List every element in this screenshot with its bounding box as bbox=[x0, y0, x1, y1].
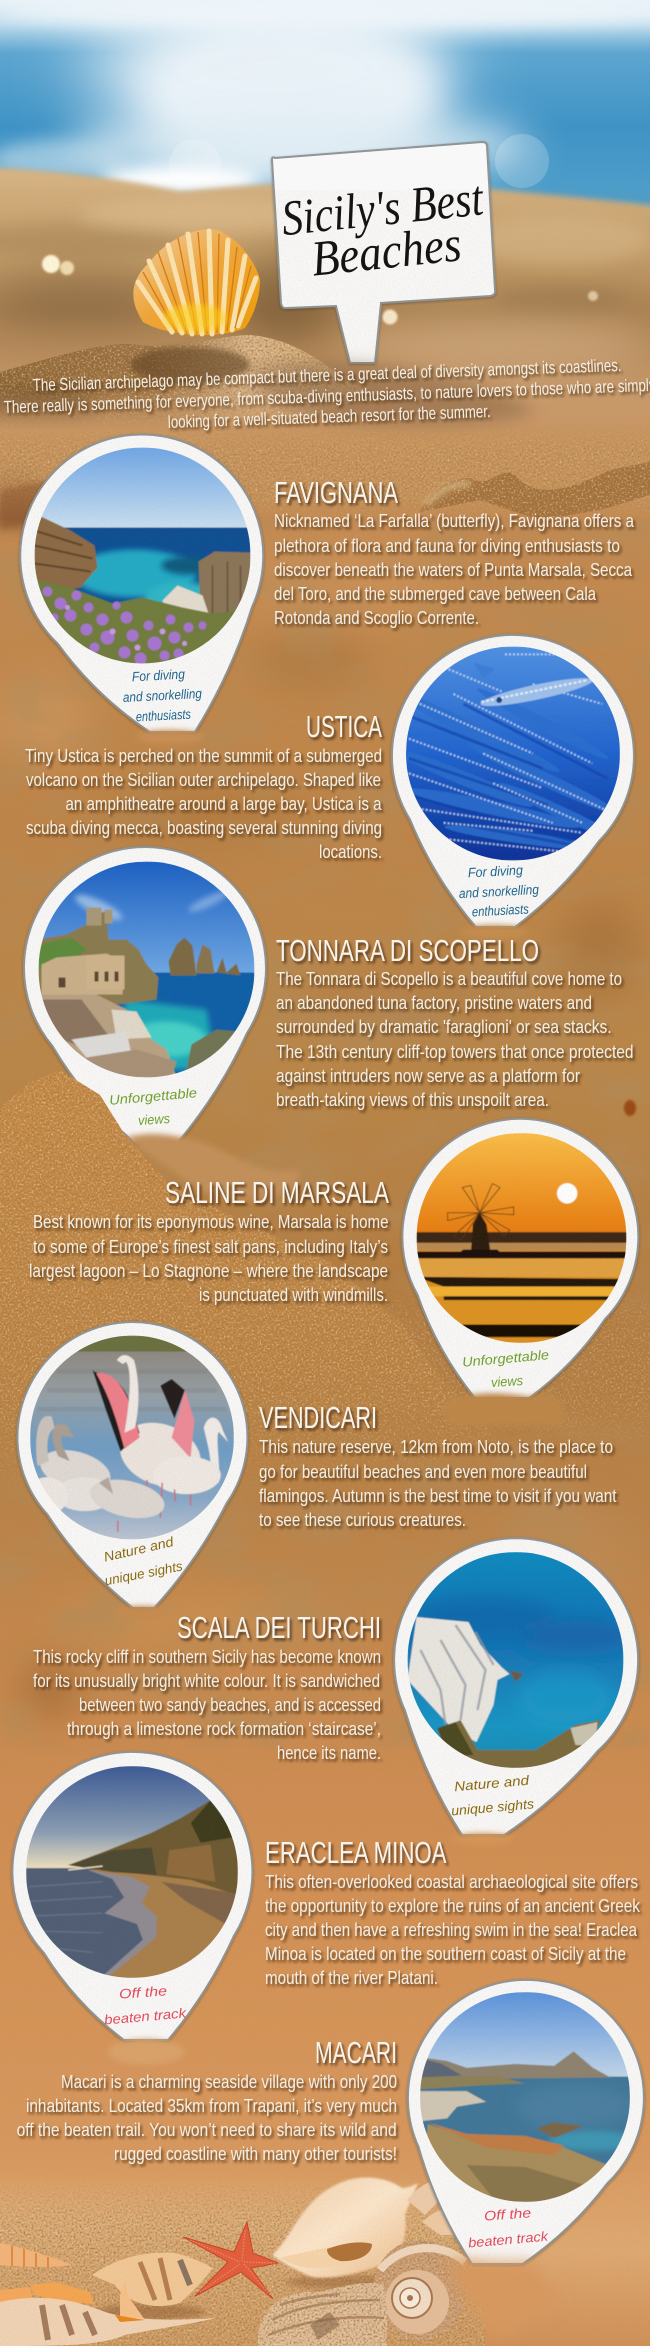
map pin: Tonnara di Scopello bbox=[24, 847, 266, 1142]
icon: spiral snail shell bbox=[373, 2240, 467, 2340]
icon: ridged clam shell bbox=[258, 2283, 387, 2346]
icon: spiky shell bbox=[0, 2298, 217, 2346]
caption: Unforgettable bbox=[109, 1085, 198, 1108]
icon: large conch shell bbox=[272, 2177, 418, 2289]
icon: small upper shells bbox=[407, 2181, 460, 2235]
photo: flamingos in a lagoon bbox=[26, 1336, 234, 1539]
shells group bbox=[0, 2177, 467, 2346]
title sign bbox=[272, 142, 495, 363]
title text bbox=[284, 186, 484, 276]
body text bbox=[259, 1436, 616, 1530]
body text: rugged coastline with many other tourists! bbox=[114, 2143, 397, 2164]
caption: Nature and bbox=[454, 1773, 530, 1794]
photo: cliffs, sea and purple flowers bbox=[34, 448, 250, 664]
caption bbox=[468, 2205, 550, 2251]
caption bbox=[102, 1534, 184, 1588]
map pin: Ustica bbox=[392, 635, 634, 927]
body text: Tiny Ustica is perched on the summit of a submerged bbox=[25, 745, 382, 766]
body text: hence its name. bbox=[277, 1742, 381, 1763]
caption bbox=[462, 1347, 550, 1390]
caption: views bbox=[490, 1373, 524, 1390]
body text: locations. bbox=[319, 841, 382, 862]
background: sky and sea bbox=[0, 0, 650, 215]
caption: Nature and bbox=[102, 1534, 175, 1565]
body text: through a limestone rock formation ‘staircase’, bbox=[67, 1718, 381, 1739]
caption bbox=[123, 670, 202, 722]
intro text bbox=[3, 355, 650, 432]
heading: MACARI bbox=[315, 2035, 397, 2070]
body text: Macari is a charming seaside village with only 200 bbox=[61, 2071, 397, 2092]
body text: This rocky cliff in southern Sicily has become known bbox=[33, 1646, 381, 1667]
map pin: Favignana bbox=[20, 434, 263, 732]
body text: against intruders now serve as a platform for bbox=[276, 1065, 580, 1086]
heading: SALINE DI MARSALA bbox=[165, 1175, 389, 1210]
caption: Unforgettable bbox=[462, 1347, 550, 1370]
caption: and snorkelling bbox=[123, 686, 203, 705]
body text: to see these curious creatures. bbox=[259, 1509, 466, 1530]
body text: Rotonda and Scoglio Corrente. bbox=[274, 607, 479, 628]
caption: and snorkelling bbox=[459, 882, 540, 901]
sand over sign foot bbox=[249, 362, 535, 425]
panel: Tonnara di Scopello bbox=[24, 847, 634, 1142]
body text: to some of Europe’s finest salt pans, including Italy’s bbox=[33, 1236, 388, 1257]
icon: scallop shell bbox=[133, 229, 260, 335]
body text bbox=[274, 510, 635, 628]
icon: striped shell bbox=[92, 2253, 213, 2320]
panel: Eraclea Minoa bbox=[12, 1752, 641, 2065]
map pin: Macari bbox=[408, 1980, 644, 2264]
caption: views bbox=[137, 1111, 171, 1128]
panel: Favignana bbox=[20, 434, 635, 744]
body text bbox=[265, 1871, 641, 1988]
body text bbox=[25, 745, 382, 862]
rippled sand crest bbox=[0, 462, 650, 530]
caption: unique sights bbox=[451, 1796, 535, 1819]
caption: For diving bbox=[468, 863, 524, 880]
caption: beaten track bbox=[468, 2229, 550, 2251]
body text: for its unusually bright white colour. It is sandwiched bbox=[33, 1670, 380, 1691]
photo: bay and mountain bbox=[420, 1992, 637, 2202]
photo: barracuda shoal bbox=[392, 646, 628, 861]
body text bbox=[276, 968, 634, 1110]
panel: Ustica bbox=[25, 635, 634, 939]
icon: cone shell bbox=[0, 2243, 72, 2267]
body text: go for beautiful beaches and even more beautiful bbox=[259, 1461, 587, 1482]
body text bbox=[29, 1211, 388, 1305]
body text: breath-taking views of this unspoilt area. bbox=[276, 1089, 549, 1110]
caption: unique sights bbox=[103, 1558, 184, 1588]
photo: curving beach and headland bbox=[26, 1766, 238, 1978]
heading: ERACLEA MINOA bbox=[265, 1835, 447, 1870]
body text: largest lagoon – Lo Stagnone – where the landscape bbox=[29, 1260, 388, 1281]
body text: mouth of the river Platani. bbox=[265, 1967, 438, 1988]
panel: Macari bbox=[17, 1980, 644, 2340]
body text: is punctuated with windmills. bbox=[199, 1284, 388, 1305]
caption: beaten track bbox=[104, 2005, 188, 2028]
intro text: looking for a well-situated beach resort for the summer. bbox=[167, 401, 491, 432]
heading: FAVIGNANA bbox=[274, 475, 398, 510]
caption bbox=[104, 1983, 188, 2028]
photo: white limestone cliff bbox=[408, 1552, 626, 1768]
icon: frilled orange shell bbox=[0, 2280, 145, 2320]
heading: VENDICARI bbox=[259, 1400, 377, 1435]
body text: an abandoned tuna factory, pristine waters and bbox=[276, 992, 592, 1013]
icon: red starfish bbox=[183, 2222, 278, 2299]
caption bbox=[459, 866, 539, 916]
caption: Off the bbox=[119, 1983, 167, 2002]
heading: SCALA DEI TURCHI bbox=[177, 1610, 381, 1645]
photo: cove, towers and sea stacks bbox=[38, 862, 254, 1078]
sand dune bbox=[0, 1070, 636, 1510]
panel: Saline di Marsala bbox=[29, 1119, 638, 1425]
map pin: Vendicari bbox=[17, 1322, 247, 1608]
caption bbox=[109, 1085, 198, 1128]
caption: enthusiasts bbox=[136, 707, 191, 724]
body text: scuba diving mecca, boasting several stunning diving bbox=[26, 817, 382, 838]
body text bbox=[33, 1646, 381, 1763]
sun glints bbox=[42, 255, 598, 324]
body text: off the beaten trail. You won’t need to share its wild and bbox=[17, 2119, 397, 2140]
title text: Beaches bbox=[309, 215, 464, 287]
body text: between two sandy beaches, and is accessed bbox=[79, 1694, 381, 1715]
body text: Best known for its eponymous wine, Marsala is home bbox=[33, 1211, 388, 1232]
panel: Scala dei Turchi bbox=[33, 1538, 638, 1845]
body text: volcano on the Sicilian outer archipelago. Shaped like bbox=[26, 769, 381, 790]
heading: USTICA bbox=[306, 709, 382, 744]
title text: Sicily's Best bbox=[279, 169, 486, 246]
map pin: Eraclea Minoa bbox=[12, 1752, 252, 2040]
body text: an amphitheatre around a large bay, Ustica is a bbox=[66, 793, 382, 814]
caption: For diving bbox=[132, 667, 186, 684]
sand heap bbox=[0, 335, 362, 435]
caption: enthusiasts bbox=[472, 901, 529, 919]
caption: Off the bbox=[484, 2205, 531, 2224]
map pin: Saline di Marsala bbox=[402, 1119, 638, 1398]
bottom sand foreground bbox=[0, 2175, 485, 2346]
heading: TONNARA DI SCOPELLO bbox=[276, 933, 539, 968]
body text: inhabitants. Located 35km from Trapani, it’s very much bbox=[26, 2095, 397, 2116]
map pin: Scala dei Turchi bbox=[394, 1538, 638, 1835]
panel: Vendicari bbox=[17, 1322, 616, 1618]
photo: windmill at sunset bbox=[417, 1133, 626, 1343]
body text bbox=[17, 2071, 397, 2164]
caption bbox=[451, 1773, 535, 1819]
